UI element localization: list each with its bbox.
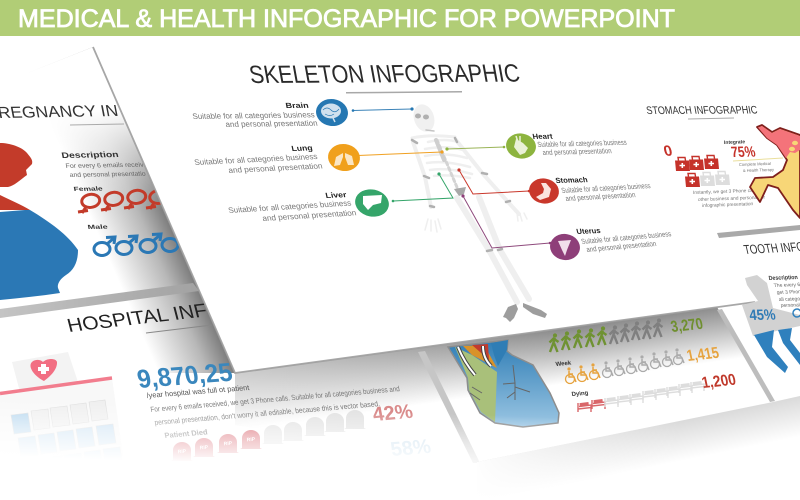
label: liver: Suitable for all categories business xyxy=(227,199,352,215)
connector: brain xyxy=(352,107,414,112)
connector: lung xyxy=(357,150,444,157)
stat: 75 percent: 75% xyxy=(730,144,757,161)
label: heart xyxy=(532,132,628,157)
connector: uterus xyxy=(461,194,551,248)
connector: stomach xyxy=(457,168,530,194)
stat: 75 percent: & Health Therapy xyxy=(743,167,774,173)
illustration: heart xyxy=(448,340,559,427)
text block: bag caption: infographic presentation xyxy=(702,201,754,209)
icon: heart xyxy=(504,131,538,161)
text block: description: and personal presentatio xyxy=(69,171,147,179)
icon: stomach xyxy=(527,176,561,206)
heading: stomach infographic: STOMACH INFOGRAPHIC xyxy=(645,104,759,117)
stat: 3,270: 3,270 xyxy=(669,315,705,336)
callout: liver xyxy=(227,172,453,223)
text block: description: For every 6 emails receiv xyxy=(65,162,145,170)
chart: beds: Dying xyxy=(571,391,589,398)
banner xyxy=(0,0,800,36)
silhouette: pregnant woman xyxy=(0,143,78,300)
callout: brain xyxy=(192,97,414,129)
callout: heart xyxy=(445,131,628,161)
label: lung: Lung xyxy=(291,143,314,153)
callout: uterus xyxy=(461,194,672,262)
label: lung xyxy=(193,143,323,175)
illustration: hospital building xyxy=(0,352,125,480)
shadows around main slide xyxy=(10,47,772,462)
label: brain xyxy=(192,101,318,129)
label: liver xyxy=(227,190,357,223)
heading: skeleton infographic: SKELETON INFOGRAPHIC xyxy=(247,60,522,89)
connector: heart xyxy=(445,146,505,151)
text block: description: Description xyxy=(61,150,119,160)
icons: RIP gravestones: RIP xyxy=(246,437,256,443)
label: brain: Suitable for all categories business xyxy=(192,110,315,121)
panel: skeleton slide xyxy=(93,40,770,373)
icons: medical bags: 0 xyxy=(662,143,674,160)
stat: 75 percent: Complete Medical xyxy=(739,161,771,167)
text block: description xyxy=(61,150,147,231)
icon: heart with cross xyxy=(30,359,57,381)
text block: bag caption: Instantly, we get 3 Phone calls xyxy=(693,188,758,196)
icon: uterus xyxy=(548,232,582,262)
text block: hospital description: /year hospital was full ot patient xyxy=(146,383,251,400)
icons: male row xyxy=(94,233,183,256)
label: uterus: and personal presentation xyxy=(585,239,657,254)
label: uterus: Suitable for all categories business xyxy=(580,229,672,246)
panel: heart slide xyxy=(418,315,738,463)
stat: patient total: 9,870,25 xyxy=(135,357,235,394)
label: uterus: Uterus xyxy=(575,226,601,236)
panel: tooth slide xyxy=(717,225,800,402)
icon: brain xyxy=(314,97,350,128)
label: stomach: Stomach xyxy=(555,175,589,185)
text block: hospital description: For every 6 emails received, we get 3 Phone calls. Suitable for all categories business and xyxy=(150,384,400,414)
illustration: stomach xyxy=(750,125,800,218)
text block: bag caption xyxy=(693,188,766,209)
label: heart: Heart xyxy=(532,132,554,141)
chart: walkers xyxy=(550,315,705,352)
icons: female row xyxy=(78,189,169,213)
icon: lung xyxy=(326,142,362,173)
label: liver: and personal presentation xyxy=(261,208,357,223)
text block: description: Male xyxy=(87,225,109,231)
text block: hospital description: personal presentation, don't worry it all editable, because this is vector based. xyxy=(154,399,381,427)
icons: RIP gravestones: RIP xyxy=(199,445,209,451)
stat: 42 percent: 42% xyxy=(371,401,415,426)
illustration: tooth xyxy=(742,275,800,373)
callout: stomach xyxy=(457,168,651,206)
icons: medical bags xyxy=(662,143,730,187)
icons: RIP gravestones xyxy=(171,410,366,461)
label: lung: Suitable for all categories business xyxy=(193,152,318,167)
callout: lung xyxy=(193,142,444,175)
stat: 75 percent: Integrate xyxy=(724,139,745,146)
chart: wheelchairs: Week xyxy=(555,361,573,368)
label: brain: and personal presentation xyxy=(225,119,318,129)
text block: tooth description: personal xyxy=(780,302,800,309)
icons: RIP gravestones: RIP xyxy=(177,449,187,455)
stat: 1,200: 1,200 xyxy=(700,371,738,392)
stat: 45 percent: 45% xyxy=(748,307,776,324)
panel: pregnancy slide xyxy=(0,102,183,300)
stat: 58 percent: 58% xyxy=(389,436,433,461)
title: MEDICAL & HEALTH INFOGRAPHIC FOR POWERPOINT xyxy=(18,5,675,33)
panel: stomach slide xyxy=(645,104,800,218)
label: heart: Suitable for all categories business xyxy=(537,138,628,149)
chart: wheelchairs xyxy=(555,344,721,384)
connector: liver xyxy=(392,172,453,202)
label: stomach: and personal presentation xyxy=(564,190,636,203)
heading: hospital infographic: HOSPITAL INF xyxy=(65,301,209,337)
text block: hospital description: Patient Died xyxy=(164,427,209,440)
stat: 1,415: 1,415 xyxy=(685,344,721,365)
label: lung: and personal presentation xyxy=(227,162,323,175)
label: uterus xyxy=(575,226,672,254)
label: liver: Liver xyxy=(324,190,347,200)
text block: hospital description xyxy=(146,383,400,440)
windows grid xyxy=(11,400,123,480)
icons: RIP gravestones: RIP xyxy=(223,441,233,447)
chart: beds xyxy=(571,371,738,412)
icon: liver xyxy=(353,186,391,220)
stat: 75 percent xyxy=(724,139,783,173)
illustration: skeleton xyxy=(410,102,547,322)
panel: hospital slide xyxy=(0,283,433,480)
label: stomach xyxy=(555,175,651,203)
label: heart: and personal presentation xyxy=(542,146,612,157)
label: brain: Brain xyxy=(285,101,310,110)
text block: tooth description xyxy=(768,275,800,309)
text block: bag caption: other business and personal for xyxy=(698,195,766,203)
text block: description: Female xyxy=(73,187,104,193)
label: stomach: Suitable for all categories business xyxy=(560,181,651,195)
